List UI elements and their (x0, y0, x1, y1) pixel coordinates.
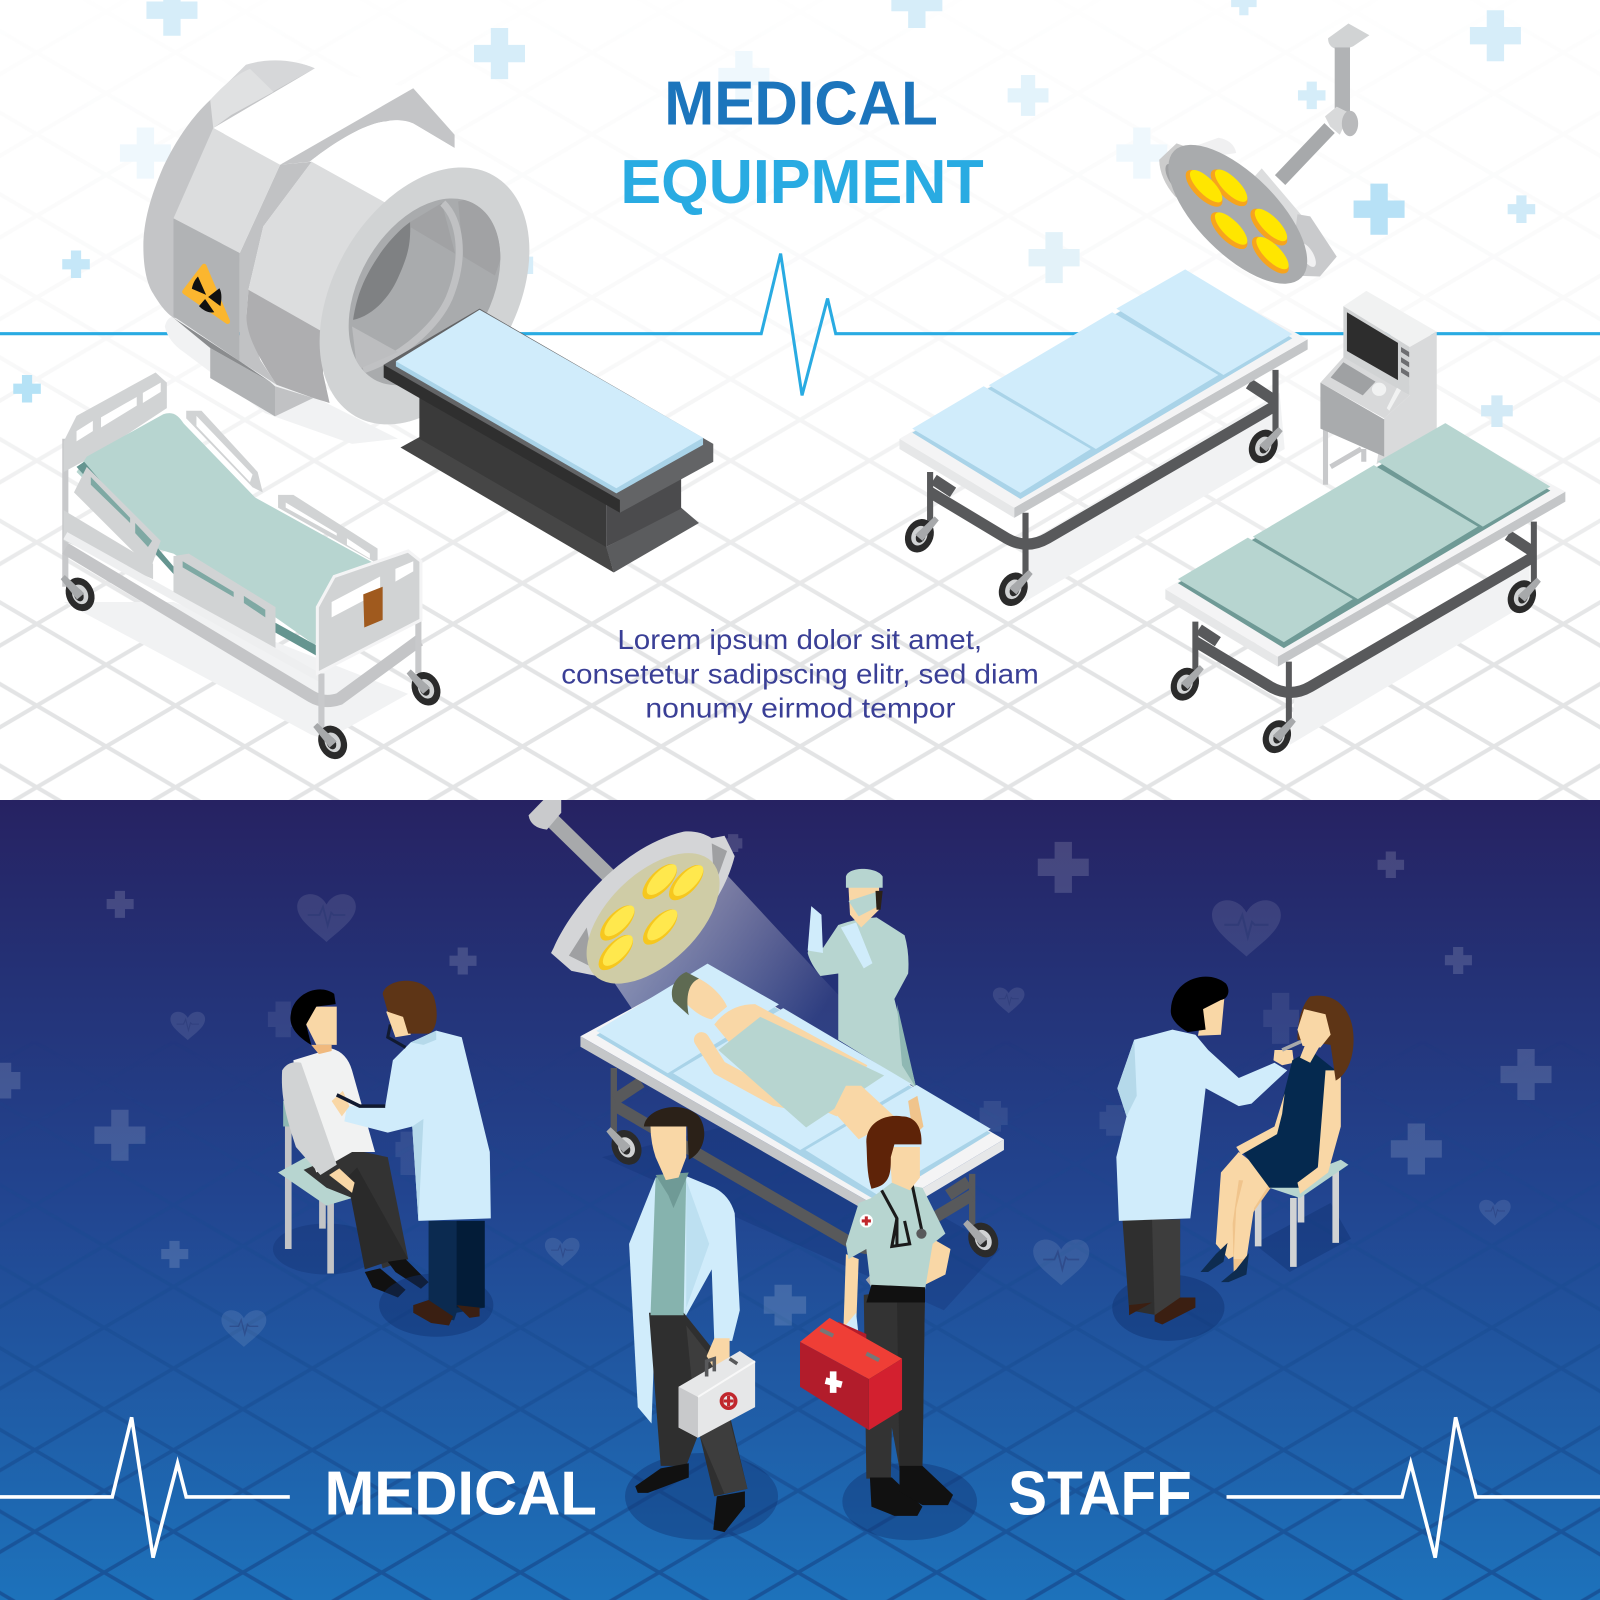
table floor shadow (602, 1116, 1000, 1310)
background plus signs (13, 0, 1535, 427)
operating table (580, 964, 1004, 1318)
doctor with stethoscope (332, 981, 493, 1337)
floor shadow under mint stretcher (1290, 556, 1530, 745)
background hearts (170, 894, 1511, 1347)
heading: staff: STAFF (1008, 1459, 1192, 1528)
floor shadow under stretcher (1024, 393, 1285, 602)
overhead lamp and light beam (529, 800, 847, 1055)
doctor examining woman (1112, 977, 1305, 1341)
MRI scanner (143, 60, 530, 444)
mint stretcher (1165, 423, 1565, 758)
nurse with red case (800, 1116, 977, 1540)
surgeon (808, 869, 916, 1088)
description text (561, 624, 1039, 723)
title: MEDICAL (664, 69, 938, 138)
ECG line (0, 254, 1600, 395)
standing doctor with first aid case (625, 1107, 778, 1540)
description text: nonumy eirmod tempor (645, 692, 956, 723)
ECG line left (0, 1417, 290, 1558)
title: EQUIPMENT (620, 148, 984, 217)
description text: Lorem ipsum dolor sit amet, (617, 624, 982, 655)
seated patient (273, 989, 429, 1297)
hospital bed (60, 372, 446, 764)
ECG line right (1227, 1417, 1600, 1558)
ceiling surgical lamp (1146, 23, 1369, 306)
patient on table (672, 972, 923, 1139)
panel: medical equipment (0, 0, 1600, 800)
radiation sign (185, 266, 228, 321)
panel: medical staff (0, 800, 1600, 1600)
heading: medical: MEDICAL (324, 1459, 597, 1528)
title (620, 69, 984, 217)
blue stretcher (899, 269, 1308, 611)
description text: consetetur sadipscing elitr, sed diam (561, 659, 1039, 690)
ultrasound monitor machine (1320, 291, 1437, 485)
background plus signs (0, 834, 1552, 1326)
seated woman on chair (1201, 996, 1354, 1282)
MRI table (384, 309, 713, 572)
